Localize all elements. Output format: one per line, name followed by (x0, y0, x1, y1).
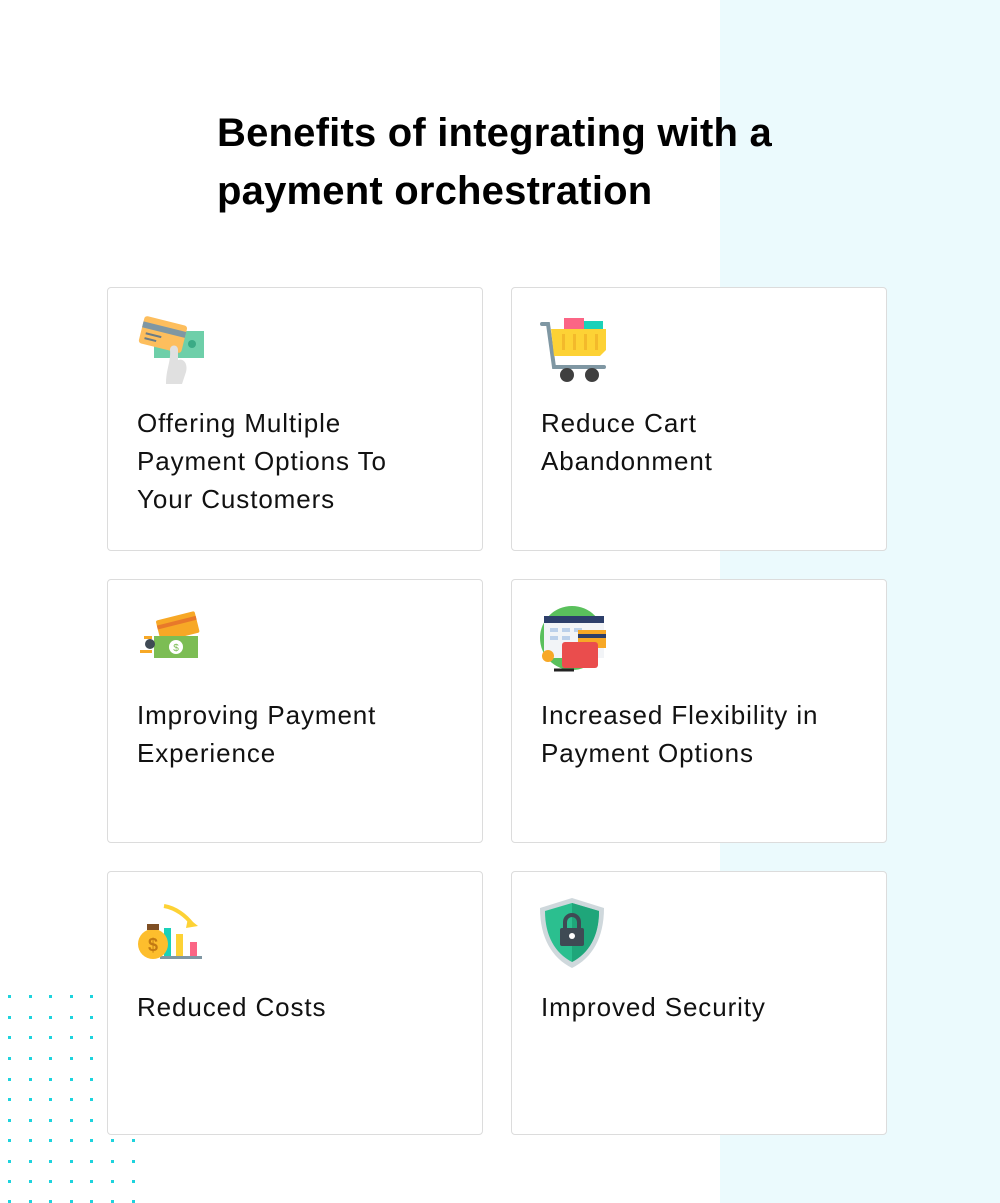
text: Payment Options To (137, 446, 387, 476)
panel: flexibility (511, 579, 887, 843)
icon: calendar wallet (540, 606, 606, 672)
panel: reduced costs (107, 871, 483, 1135)
text: Your Customers (137, 484, 335, 514)
icon: cards and cash: $ (173, 643, 179, 654)
title: payment orchestration (217, 169, 652, 213)
title: Benefits of integrating with a (217, 111, 772, 155)
panel: multiple payment options (107, 287, 483, 551)
text: Improving Payment (137, 700, 376, 730)
text: Experience (137, 738, 276, 768)
icon: shopping cart (540, 318, 606, 382)
text (137, 700, 376, 768)
panel: security (511, 871, 887, 1135)
icon: money bag chart (138, 904, 202, 959)
icon: shield lock (540, 898, 604, 968)
dot pattern (8, 995, 135, 1203)
text (137, 408, 387, 514)
title (217, 111, 772, 213)
icon: money bag chart: $ (148, 935, 158, 955)
text: Reduce Cart (541, 408, 697, 438)
text: Abandonment (541, 446, 713, 476)
text: Increased Flexibility in (541, 700, 818, 730)
panel: cart abandonment (511, 287, 887, 551)
text (541, 700, 818, 768)
icon: cards and cash (140, 611, 200, 658)
text: Payment Options (541, 738, 754, 768)
text: Improved Security (541, 992, 766, 1022)
icon: card and cash in hand (138, 316, 204, 384)
text: Offering Multiple (137, 408, 341, 438)
panel: payment experience (107, 579, 483, 843)
text: Reduced Costs (137, 992, 326, 1022)
text (541, 408, 713, 476)
